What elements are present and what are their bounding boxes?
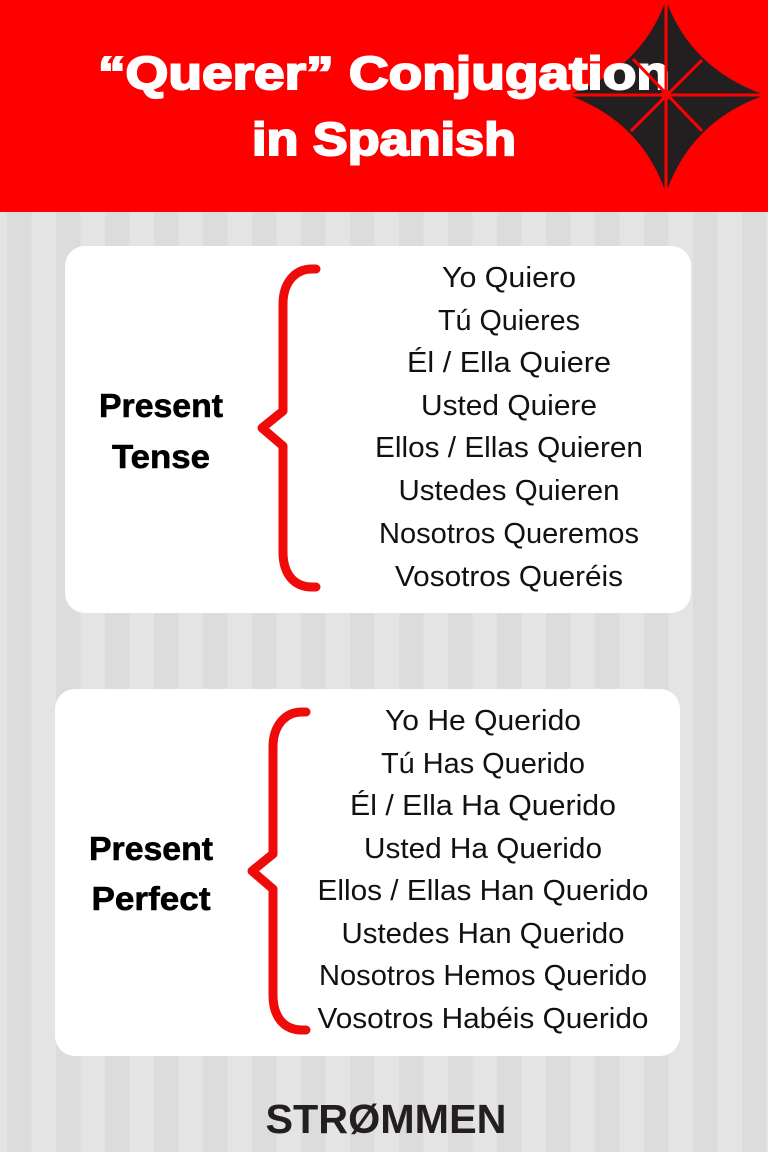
panel: present tense xyxy=(65,246,691,613)
conjugation list: present perfect: Yo He Querido xyxy=(385,705,581,737)
icon: dark four-point star xyxy=(568,0,765,193)
heading: present perfect: Present xyxy=(89,830,213,867)
heading: present tense: Tense xyxy=(112,438,210,475)
conjugation list: present perfect: Nosotros Hemos Querido xyxy=(319,960,647,992)
heading: present tense: Present xyxy=(99,387,223,424)
conjugation list: present tense: Nosotros Queremos xyxy=(379,518,639,550)
conjugation list: present tense xyxy=(375,262,643,593)
conjugation list: present tense: Ustedes Quieren xyxy=(398,475,620,507)
conjugation list: present tense: Ellos / Ellas Quieren xyxy=(375,432,643,464)
bracket: present perfect xyxy=(252,712,306,1030)
title: in Spanish xyxy=(252,113,516,165)
conjugation list: present perfect: Vosotros Habéis Querido xyxy=(318,1003,648,1035)
bracket: present tense xyxy=(262,269,316,587)
conjugation list: present perfect xyxy=(318,705,648,1035)
conjugation list: present perfect: Usted Ha Querido xyxy=(364,833,602,865)
title xyxy=(98,47,670,165)
heading: present perfect xyxy=(89,830,213,917)
conjugation list: present tense: Usted Quiere xyxy=(421,390,597,422)
conjugation list: present tense: Yo Quiero xyxy=(442,262,576,294)
icon: star red dividing lines xyxy=(568,0,765,193)
title: “Querer” Conjugation xyxy=(98,47,670,99)
conjugation list: present perfect: Ellos / Ellas Han Querido xyxy=(318,875,648,907)
conjugation list: present perfect: Tú Has Querido xyxy=(381,748,585,780)
heading: present tense xyxy=(99,387,223,475)
heading: present perfect: Perfect xyxy=(92,880,211,917)
conjugation list: present perfect: Él / Ella Ha Querido xyxy=(350,789,616,822)
logo: Strømmen: STRØMMEN xyxy=(266,1096,506,1142)
panel: present perfect xyxy=(55,689,680,1056)
conjugation list: present tense: Tú Quieres xyxy=(438,305,580,337)
header banner xyxy=(0,0,768,212)
conjugation list: present tense: Él / Ella Quiere xyxy=(407,346,611,379)
conjugation list: present perfect: Ustedes Han Querido xyxy=(342,918,624,950)
conjugation list: present tense: Vosotros Queréis xyxy=(395,561,623,593)
